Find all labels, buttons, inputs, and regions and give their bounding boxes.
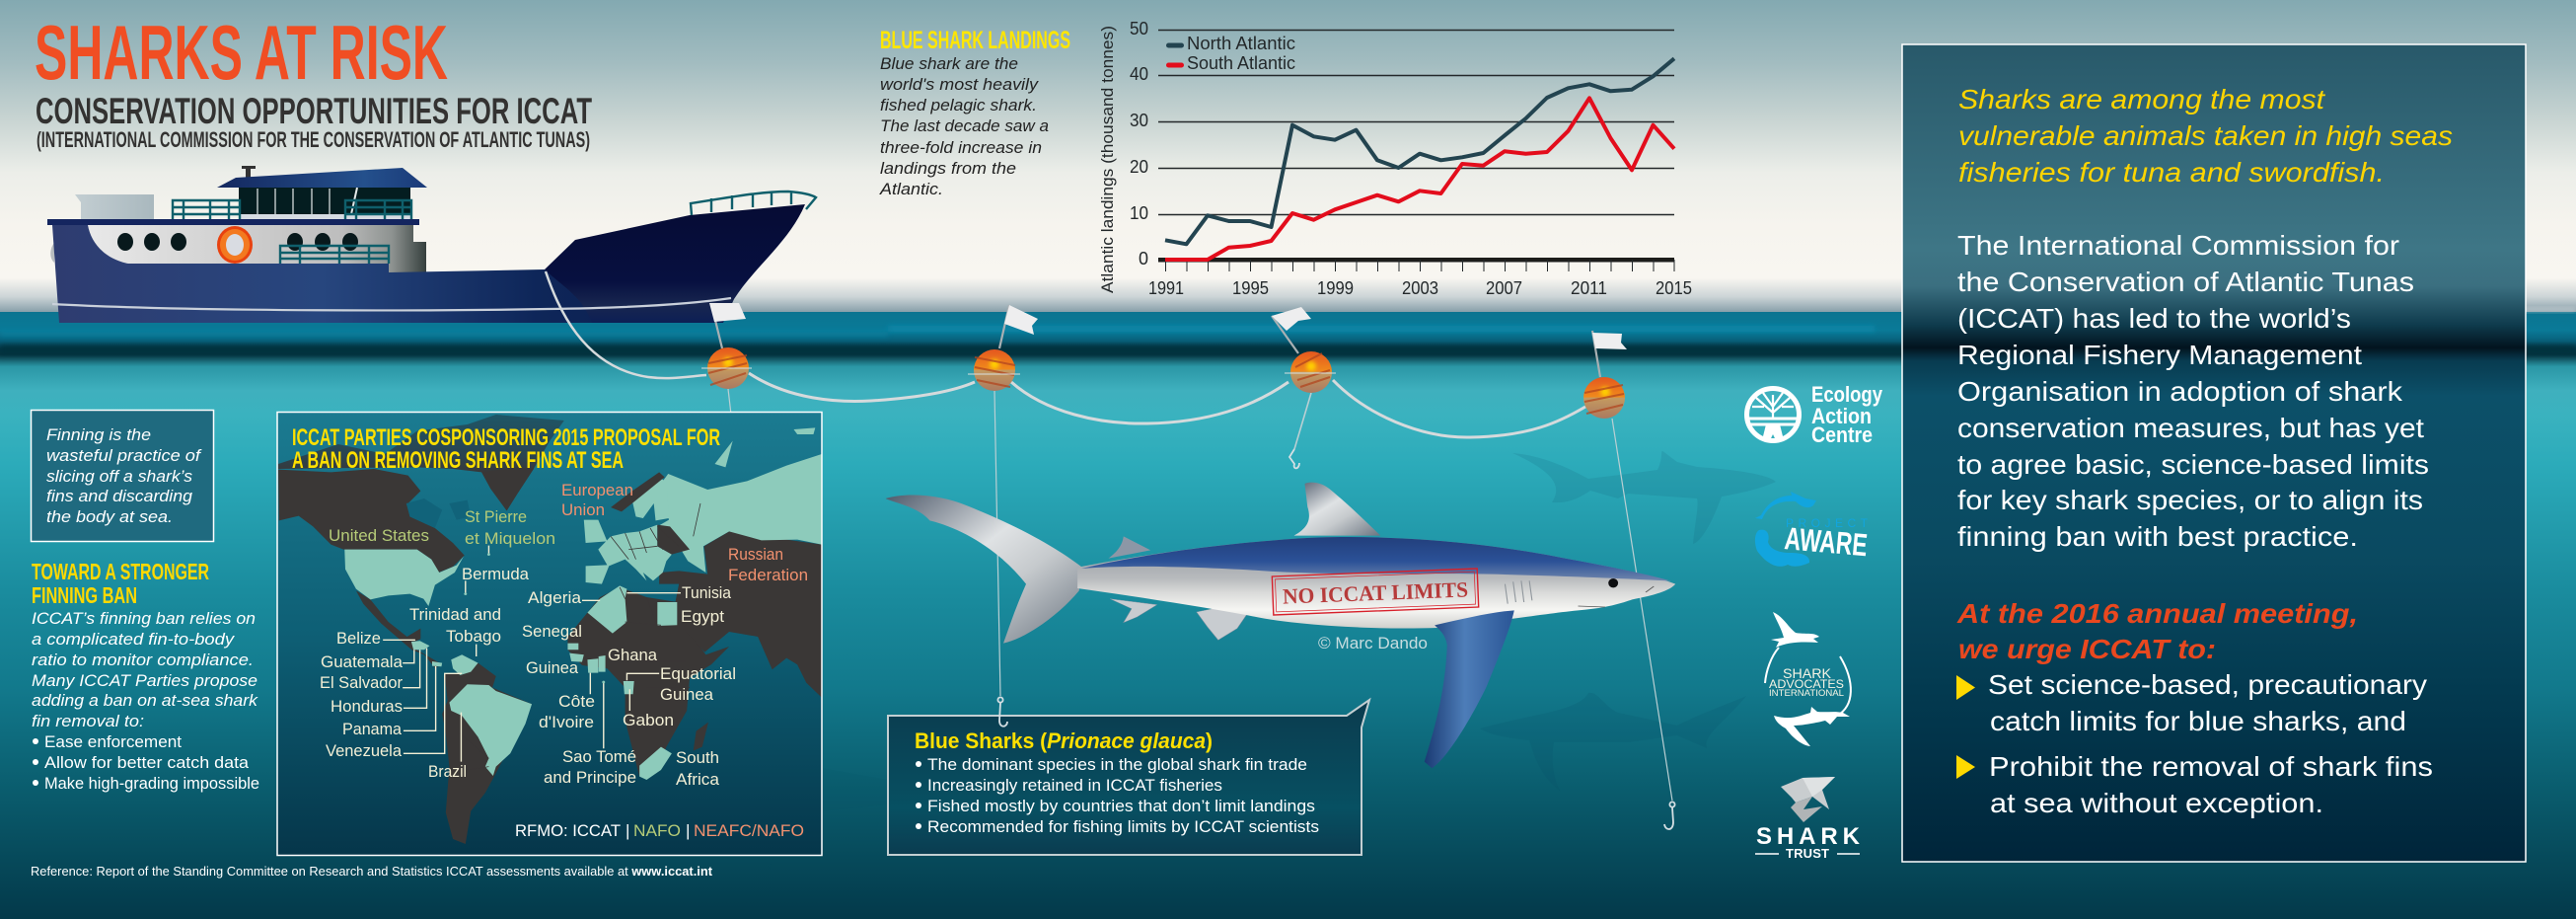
shark body — [1077, 537, 1675, 629]
map heading: A BAN ON REMOVING SHARK FINS AT SEA — [292, 447, 624, 474]
recommendation 2: Prohibit the removal of shark fins — [1989, 751, 2433, 782]
recommendation 2: at sea without exception. — [1990, 788, 2323, 818]
legend: North Atlantic — [1187, 34, 1295, 53]
panel: finning definition — [32, 411, 213, 541]
line chart: Atlantic landings — [1098, 19, 1692, 298]
map country labels: El Salvador — [320, 673, 403, 692]
background shark silhouettes — [612, 451, 1776, 869]
illustration: fishing boat — [47, 166, 816, 323]
paragraph: ICCAT’s finning ban relies on — [32, 609, 256, 628]
call to action heading: we urge ICCAT to: — [1958, 634, 2216, 664]
callout bullets: Increasingly retained in ICCAT fisheries — [927, 776, 1222, 795]
South America land — [442, 663, 532, 844]
legend — [1166, 34, 1295, 73]
map country labels: Sao Tomé — [562, 747, 636, 766]
text: toward a stronger finning ban — [32, 559, 259, 793]
body paragraph: The International Commission for — [1957, 230, 2399, 261]
Norway land — [611, 472, 665, 511]
y axis values — [1130, 19, 1148, 268]
y axis values: 10 — [1130, 203, 1148, 223]
map country labels: and Principe — [544, 768, 636, 787]
paragraph: landings description: Blue shark are the — [880, 54, 1018, 73]
body paragraph: conservation measures, but has yet — [1957, 413, 2424, 443]
reference note: Reference: Report of the Standing Committee on Research and Statistics ICCAT assessments available at www.iccat.int — [31, 864, 713, 879]
y axis values: 0 — [1139, 249, 1148, 268]
map country labels: Honduras — [331, 697, 403, 716]
boat tank — [75, 194, 154, 219]
y axis values: 40 — [1130, 64, 1148, 84]
call to action heading — [1956, 598, 2358, 664]
body paragraph: Regional Fishery Management — [1957, 340, 2362, 370]
buoys — [701, 347, 1625, 419]
hook lines — [728, 389, 1672, 801]
map country labels: Tobago — [446, 627, 501, 646]
x axis years — [1148, 278, 1692, 298]
Greenland land — [481, 467, 534, 510]
Asia land — [659, 531, 822, 698]
map country labels: Ghana — [608, 646, 658, 664]
map country labels: Equatorial — [660, 664, 736, 683]
shark second dorsal — [1108, 536, 1150, 559]
ICCAT members — [344, 550, 464, 606]
stamp: no ICCAT limits — [1272, 569, 1479, 615]
logo: Shark Trust: SHARK — [1756, 823, 1861, 850]
RFMO legend — [515, 821, 804, 840]
y axis values: 30 — [1130, 111, 1148, 130]
stamp: no ICCAT limits: NO ICCAT LIMITS — [1283, 576, 1468, 609]
intro in yellow italics: fisheries for tuna and swordfish. — [1958, 157, 2385, 188]
text: blue shark landings — [879, 27, 1070, 198]
intro in yellow italics: Sharks are among the most — [1958, 84, 2325, 115]
paragraph: Many ICCAT Parties propose — [32, 671, 258, 690]
hooks — [728, 415, 1675, 829]
body paragraph: the Conservation of Atlantic Tunas — [1957, 267, 2414, 297]
body paragraph: for key shark species, or to align its — [1957, 485, 2423, 515]
panel: ICCAT summary — [1902, 44, 2526, 862]
shark gills and eye — [1505, 580, 1532, 604]
bullet list: Make high-grading impossible — [44, 774, 259, 793]
recommendation 2 — [1956, 751, 2433, 818]
logo: Ecology Action Centre: Action — [1811, 404, 1872, 428]
intro in yellow italics: vulnerable animals taken in high seas — [1958, 120, 2453, 151]
y axis values: 20 — [1130, 157, 1148, 177]
x axis — [1158, 258, 1674, 271]
North Africa members — [587, 585, 626, 634]
longline with buoys, flags and hooks — [546, 271, 1675, 829]
callout bullets — [916, 755, 1319, 836]
shark dorsal fin — [1294, 483, 1380, 536]
RFMO legend: NAFO — [633, 821, 681, 840]
x axis years: 2003 — [1402, 278, 1438, 298]
bullet list: Allow for better catch data — [44, 753, 250, 772]
map country labels: Panama — [342, 720, 403, 738]
boat cabin — [217, 166, 427, 219]
map country labels: Africa — [676, 770, 720, 789]
legend: South Atlantic — [1187, 53, 1295, 73]
logo: Ecology Action Centre: Centre — [1811, 422, 1873, 447]
recommendation 1 — [1956, 669, 2427, 736]
call to action heading: At the 2016 annual meeting, — [1956, 598, 2358, 629]
callout: blue sharks — [888, 700, 1369, 855]
world map — [278, 415, 822, 844]
UK member — [584, 520, 607, 543]
x axis years: 2007 — [1486, 278, 1522, 298]
logo: Project AWARE: AWARE — [1783, 520, 1869, 563]
paragraph: landings description: fished pelagic shark. — [880, 96, 1037, 115]
Europe member — [586, 525, 672, 584]
map country labels: European — [561, 481, 633, 499]
paragraph: landings description: Atlantic. — [879, 180, 943, 198]
y axis label: Atlantic landings (thousand tonnes) — [1098, 26, 1117, 293]
logo: Shark Advocates International — [1765, 612, 1851, 746]
map country labels: Tunisia — [682, 583, 732, 602]
map heading: ICCAT PARTIES COSPONSORING 2015 PROPOSAL FOR — [292, 424, 720, 451]
panel: finning definition: slicing off a shark’s — [46, 467, 193, 486]
Ukraine land — [657, 525, 690, 555]
paragraph: landings description — [879, 54, 1049, 198]
map country labels: Guinea — [526, 658, 579, 677]
Africa land — [567, 587, 729, 777]
body paragraph — [1957, 230, 2429, 552]
RFMO legend: NEAFC/NAFO — [694, 821, 804, 840]
x axis years: 1995 — [1232, 278, 1269, 298]
North America land — [278, 469, 465, 573]
bullet list: Ease enforcement — [44, 732, 182, 751]
bullet list — [33, 732, 259, 793]
x axis years: 1991 — [1148, 278, 1184, 298]
logo: Shark Advocates International: INTERNATIONAL — [1769, 688, 1844, 698]
map country labels: Federation — [728, 566, 808, 584]
boat superstructure — [50, 225, 426, 272]
series: North Atlantic — [1165, 58, 1674, 244]
map country labels: Guinea — [660, 685, 714, 704]
series: South Atlantic — [1165, 98, 1674, 260]
Mexico and Central America land — [356, 590, 442, 668]
panel: finning definition: Finning is the — [46, 425, 151, 444]
paragraph: adding a ban on at-sea shark — [32, 691, 259, 710]
panel: finning definition: wasteful practice of — [46, 446, 202, 465]
logo: Shark Advocates International: ADVOCATES — [1769, 677, 1844, 691]
map country labels: Senegal — [522, 622, 582, 641]
paragraph — [32, 609, 259, 730]
body paragraph: Organisation in adoption of shark — [1957, 376, 2403, 407]
heading: TOWARD A STRONGER — [32, 559, 209, 584]
Arctic islands member — [714, 427, 815, 467]
map country labels: Bermuda — [462, 565, 530, 583]
panel: ICCAT map — [277, 413, 822, 855]
subtitle: CONSERVATION OPPORTUNITIES FOR ICCAT — [36, 91, 592, 131]
map country labels — [320, 481, 808, 789]
rope from boat — [546, 271, 706, 378]
paragraph: landings description: The last decade saw a — [880, 116, 1049, 135]
map country labels: Algeria — [528, 588, 582, 607]
paragraph: ratio to monitor compliance. — [32, 651, 254, 669]
heading: blue shark landings: BLUE SHARK LANDINGS — [880, 27, 1070, 54]
credit: © Marc Dando — [1318, 634, 1428, 652]
shark tail — [885, 495, 1081, 644]
body paragraph: (ICCAT) has led to the world’s — [1957, 303, 2351, 334]
callout bullets: Recommended for fishing limits by ICCAT scientists — [927, 817, 1319, 836]
map country labels: Union — [561, 500, 605, 519]
map country labels: Belize — [336, 629, 381, 648]
shark pectoral fin — [1425, 610, 1514, 768]
RFMO legend: | — [626, 821, 629, 840]
logo: Ecology Action Centre: Ecology — [1811, 382, 1883, 407]
x axis years: 1999 — [1317, 278, 1354, 298]
subtitle line 2: (INTERNATIONAL COMMISSION FOR THE CONSERVATION OF ATLANTIC TUNAS) — [37, 127, 590, 152]
logo: Shark Trust: TRUST — [1786, 846, 1829, 861]
Scandinavia member — [632, 477, 669, 520]
body paragraph: to agree basic, science-based limits — [1957, 449, 2429, 480]
body paragraph: finning ban with best practice. — [1957, 521, 2358, 552]
heading — [32, 559, 209, 608]
map country labels: Russian — [728, 545, 783, 564]
recommendation 1: catch limits for blue sharks, and — [1990, 706, 2406, 736]
country borders — [460, 503, 700, 770]
shark anal and pelvic fins — [1110, 599, 1251, 640]
shark back colouring — [1081, 537, 1671, 581]
intro in yellow italics — [1958, 84, 2453, 188]
map leader lines — [383, 546, 681, 762]
paragraph: fin removal to: — [32, 712, 144, 730]
boat railings — [173, 191, 816, 264]
life ring — [217, 226, 253, 264]
map country labels: United States — [329, 526, 429, 545]
map country labels: Guatemala — [321, 652, 404, 671]
map country labels: Côte — [558, 692, 595, 711]
logo: Project AWARE: PROJECT — [1786, 516, 1869, 530]
logo: Shark Advocates International: SHARK — [1783, 665, 1832, 681]
heading: FINNING BAN — [32, 582, 137, 608]
paragraph: a complicated fin-to-body — [32, 630, 236, 649]
callout heading: Blue Sharks (Prionace glauca) — [915, 728, 1213, 753]
map country labels: Trinidad and — [409, 605, 501, 624]
map country labels: Gabon — [623, 711, 674, 729]
flags — [709, 303, 1627, 377]
Russia member — [657, 454, 822, 573]
recommendation 1: Set science-based, precautionary — [1988, 669, 2427, 700]
map country labels: d'Ivoire — [539, 713, 594, 731]
panel: finning definition: the body at sea. — [46, 507, 173, 526]
map country labels: et Miquelon — [465, 529, 555, 548]
map country labels: Venezuela — [326, 741, 403, 760]
logo: Ecology Action Centre — [1746, 382, 1883, 447]
rope sections — [749, 373, 1585, 437]
gridlines — [1158, 30, 1674, 215]
hook over callout — [999, 703, 1007, 727]
RFMO legend: | — [686, 821, 690, 840]
Hudson Bay — [406, 498, 471, 528]
x axis years: 2015 — [1656, 278, 1692, 298]
map country labels: St Pierre — [465, 507, 527, 526]
y axis values: 50 — [1130, 19, 1148, 38]
Arctic land fading behind heading — [278, 415, 564, 510]
title: SHARKS AT RISK — [35, 9, 448, 96]
RFMO legend: RFMO: ICCAT — [515, 821, 621, 840]
x axis years: 2011 — [1571, 278, 1607, 298]
callout bullets: Fished mostly by countries that don’t limit landings — [927, 797, 1315, 815]
West Africa members — [567, 644, 634, 694]
map heading — [292, 424, 720, 474]
logo: Shark Trust — [1755, 777, 1861, 861]
illustration: blue shark — [885, 483, 1675, 768]
map country labels: Brazil — [428, 762, 467, 781]
paragraph: landings description: world's most heavily — [880, 75, 1040, 94]
map country labels: South — [676, 748, 719, 767]
logo: Project AWARE — [1755, 492, 1869, 567]
paragraph: landings description: three-fold increase in — [880, 138, 1042, 157]
map country labels: Egypt — [681, 607, 724, 626]
callout bullets: The dominant species in the global shark fin trade — [927, 755, 1307, 774]
paragraph: landings description: landings from the — [880, 159, 1016, 178]
boat hull — [47, 204, 805, 323]
panel: finning definition: fins and discarding — [46, 487, 193, 505]
